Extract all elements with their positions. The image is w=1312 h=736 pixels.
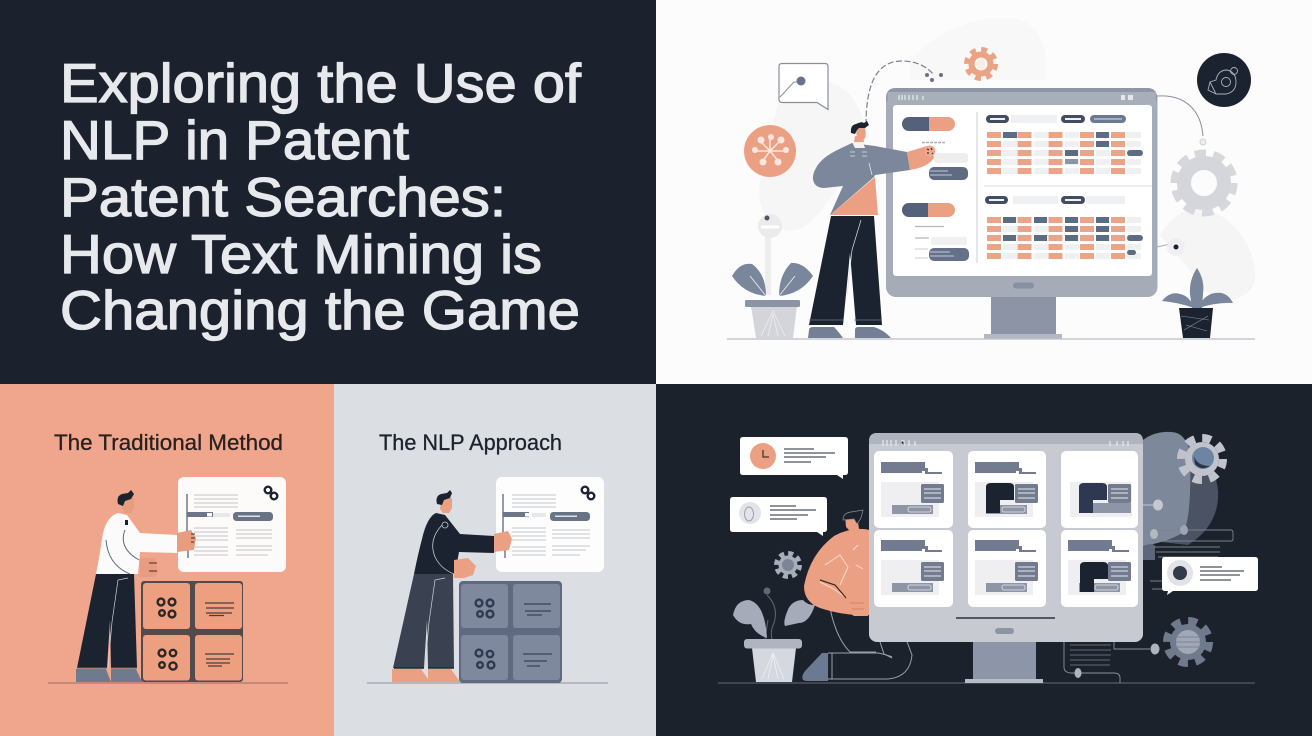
illustration: seated figure xyxy=(802,510,912,681)
blob: background shapes behind monitor xyxy=(1143,432,1233,589)
title: Exploring the Use of xyxy=(60,52,582,114)
illustration: right plant xyxy=(1162,268,1233,338)
panel: analyst at monitor illustration xyxy=(656,0,1312,384)
ground line xyxy=(718,682,1255,684)
panel: the NLP approach xyxy=(334,384,656,736)
ground line xyxy=(367,682,608,684)
document card xyxy=(496,477,604,572)
circuit lines xyxy=(1064,642,1160,683)
result cards xyxy=(874,451,1138,607)
left column controls xyxy=(902,117,969,261)
illustration: potted plant xyxy=(733,588,815,682)
title: Patent Searches: xyxy=(60,166,506,228)
icon: large gray gear xyxy=(1175,154,1233,212)
callout: clock bubble xyxy=(740,437,848,479)
icon grid: documents xyxy=(459,581,562,683)
icon: network circle xyxy=(744,125,796,177)
figure: white shirt analyst xyxy=(76,490,196,682)
illustration: left plant xyxy=(732,214,813,338)
icon: monitor xyxy=(886,88,1158,338)
title: NLP in Patent xyxy=(60,109,409,171)
panel: results dashboard illustration xyxy=(656,384,1312,736)
arrow: monitor to gear xyxy=(1157,96,1206,145)
panel: title xyxy=(0,0,656,384)
figure: dark shirt analyst xyxy=(392,490,512,682)
arrow: dashed curve xyxy=(866,61,943,125)
document card xyxy=(178,477,286,572)
ground line xyxy=(48,682,288,684)
icon: upper gear xyxy=(1181,438,1223,480)
title: Changing the Game xyxy=(60,279,580,341)
heading: The NLP Approach xyxy=(379,430,562,455)
icon: lower gear xyxy=(1167,621,1209,663)
ground line xyxy=(727,338,1255,340)
icon grid: documents xyxy=(141,581,243,682)
icon: salmon gear xyxy=(966,50,996,78)
table: lower results xyxy=(985,196,1143,259)
panel: the traditional method xyxy=(0,384,334,736)
icon: monitor with result cards xyxy=(869,433,1143,683)
callout: fingerprint bubble xyxy=(730,497,827,536)
illustration: analyst figure xyxy=(808,121,936,338)
table: upper results xyxy=(986,115,1143,174)
icon: dark circle badge xyxy=(1197,53,1251,107)
heading: The Traditional Method xyxy=(54,430,283,455)
icon: small gear xyxy=(776,554,800,576)
callout: dial bubble xyxy=(1162,557,1258,595)
icon: speech bubble xyxy=(779,64,828,110)
title xyxy=(60,52,582,341)
icon: connector node xyxy=(1157,238,1185,256)
title: How Text Mining is xyxy=(60,223,542,285)
